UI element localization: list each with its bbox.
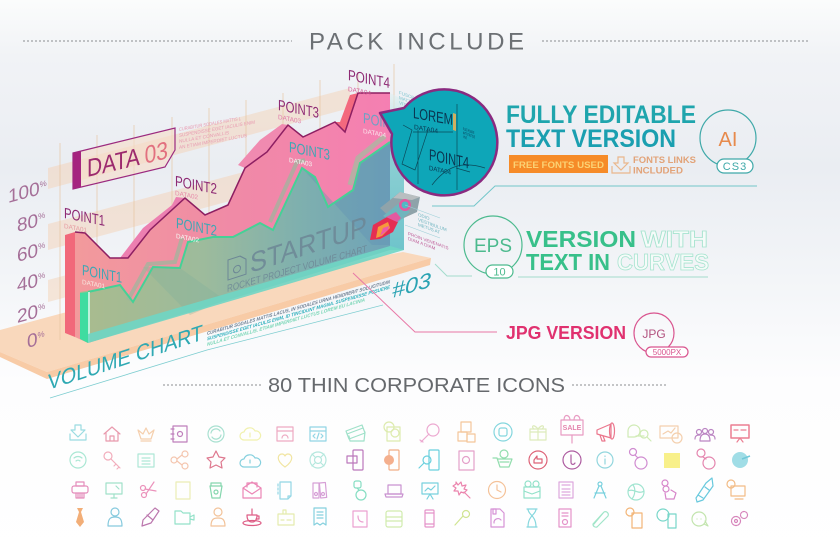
icon: chat gifts [697,449,715,469]
side notes by rocket: VITAE [399,100,412,110]
icon: paper clip [593,512,608,527]
side notes by rocket [399,90,448,256]
side notes by rocket: ODIO [418,212,429,221]
fonts links [633,155,696,176]
callout: fully editable: FULLY EDITABLE [506,101,696,129]
icon: presentation monitor [731,425,749,442]
icon: coins [384,422,400,441]
axis percentages [8,177,47,353]
badge: free fonts used: FREE FONTS USED [513,160,604,171]
fonts links: INCLUDED [633,166,683,176]
teal base band [88,246,404,343]
icon: note [278,482,291,499]
badge: JPG 5000PX [634,313,688,357]
icon: id card [138,454,154,467]
axis percentages: 20 [17,302,38,328]
icon: magnifier [420,424,439,442]
axis percentages: % [38,329,45,340]
pink series labels: DATA03 [278,114,301,126]
icon: cards [346,425,365,441]
data 03 tag [73,128,175,189]
chart number: #03 [392,268,431,303]
lorem sample: LOREM [413,105,453,129]
icon row 1 [70,415,749,443]
icon: monitor [106,483,122,498]
axis percentages: % [40,179,47,189]
tag description text: CURABITUR SODALES MATTIS L [179,116,241,133]
green area series [80,136,390,343]
side notes by rocket: MATTIS [399,95,415,106]
icon: presentation [422,483,438,499]
icon: search phone [419,450,439,470]
icon: cloud help [240,455,261,467]
icon: browser code [310,427,326,441]
icon: phone chat [626,508,642,528]
icon: cart [493,450,512,467]
axis percentages: % [38,241,45,251]
icon: envelope [243,482,261,498]
pink area series [65,93,390,343]
icon: phone orange [384,450,399,470]
icon: compass [594,482,606,498]
icon: chat magnifier [628,425,651,441]
icon: notebook [171,426,187,442]
icon row 2 [70,448,750,470]
icon: megaphone [597,423,614,441]
callout bubble: text zoom: FUSCE POSUERE [463,126,495,143]
badge: AI CS3: AI [719,129,737,151]
icon: coins hand [662,480,676,499]
icon: sale sign: SALE [563,425,582,432]
data 03 tag: DATA 03 [87,137,168,183]
icon: browser gauge [277,427,293,441]
teal series labels: DATA04 [363,128,386,140]
pink series labels: DATA01 [64,223,87,235]
icon: chart card [660,426,682,443]
teal series labels: POINT3 [289,139,330,164]
icon: document [314,508,326,525]
icon: lifebuoy [310,452,326,468]
icon: phone circle [563,451,581,469]
axis percentages: 0 [27,329,38,353]
icon: refresh [208,426,224,442]
peach level bands [48,88,350,302]
icon: printer [386,511,402,527]
teal series labels: DATA02 [176,233,199,245]
tag description text: SUSPENDISSE EGET IACULIS ENIM [179,120,255,139]
chart description text: SUSPENDISSE EGET IACULIS ENIM, ID TINCIDUNT MAGNA. SUSPENDISSE POSUERE [207,285,391,342]
teal series labels: POINT2 [176,215,217,240]
side notes by rocket: DIAM A DIAM [408,236,436,251]
pink series labels: DATA04 [348,86,371,98]
callout: text in curves: WITH [641,226,708,252]
icon: tie [76,508,84,527]
icon: phone card [347,450,363,470]
callout: text in curves: CURVES [617,249,709,275]
callout: text in curves [435,216,709,278]
icon: push pin [455,510,470,525]
icon: boxes [458,422,475,442]
icon: people [695,428,715,441]
badge: JPG 5000PX: JPG [642,327,666,341]
badge: EPS 10 [464,216,522,278]
side notes by rocket: FUSCE [399,90,414,100]
startup label: STARTUP [250,211,367,280]
tag description text: AN ETIAM IMPERDIET LUCTUS [179,133,247,151]
icon: download [612,157,630,173]
icon: heart [278,454,292,467]
icon: hourglass [527,509,537,527]
icon: pie chart [732,452,750,468]
icon: tablet [176,482,190,499]
heading: 80 thin corporate icons: 80 THIN CORPORATE ICONS [268,375,565,397]
badge: AI CS3 [700,110,756,173]
icon: cloud [240,428,261,440]
startup label [227,211,367,295]
teal series labels: POINT4 [363,110,404,135]
callout bubble: text zoom: DATA04 [414,124,438,135]
small notes: VITAE [463,134,467,140]
title: pack include: PACK INCLUDE [309,28,524,56]
icon: house [104,427,120,441]
badge: free fonts used [509,155,608,173]
icon: printer [72,482,88,498]
callout: jpg version [353,273,688,357]
icon: gift [530,426,546,440]
badge: JPG 5000PX: 5000PX [653,348,682,357]
point4 sample: POINT4 [429,146,469,172]
axis percentages: 40 [17,271,38,297]
chart description text: CURABITUR SODALES MATTIS LACUS, IN SODALES URNA HENDRERIT SOLLICITUDIN [207,279,390,337]
icon: circle box [494,423,512,441]
teal series labels: POINT1 [82,262,122,287]
pink series labels: POINT4 [348,67,390,92]
icon: star [207,451,225,468]
icon: burst magnifier [453,482,470,498]
icon: people link [630,448,647,469]
icon: globe chat [628,484,644,500]
callout: fully editable: TEXT VERSION [506,125,676,153]
axis percentages: % [38,271,45,281]
icon: document seal [559,509,571,527]
axis percentages: 80 [17,211,38,237]
pink series labels [64,67,390,235]
callout bubble: text zoom: MATTIS TRISTIQUE [463,130,475,139]
pink series labels: POINT1 [64,205,105,230]
icon: gears [732,512,748,526]
icon: sale sign [561,415,583,443]
icon: phone book [353,511,367,527]
icon: floppy document [228,254,246,280]
icon: rocket [370,192,420,240]
axis percentages: % [38,211,45,221]
pink series labels: DATA02 [175,190,198,202]
teal series labels [82,110,404,291]
callout bubble: text zoom [380,89,497,195]
axis percentages: 100 [8,179,40,208]
tag description text [179,114,255,151]
icon: binders [313,483,327,498]
isometric volume chart [0,64,431,398]
icon: info circle [597,452,613,468]
icon: wifi circle [70,452,86,468]
chart description text: NULLA ET CONVALLIS. ETIAM IMPERDIET LUCTUS LOREM EU LACINIA [207,297,365,348]
callout: text in curves: VERSION [526,226,636,252]
icon row 4 [76,508,748,528]
icon: like circle [529,451,547,469]
icon: document chart [491,509,504,527]
icon: key [104,452,120,469]
callout bubble: text zoom: DATA04 [429,165,451,177]
icon: share [171,451,188,469]
badge: EPS 10: 10 [493,266,506,278]
icon: pen [142,508,159,526]
side notes by rocket: PROIN VENENATIS [408,231,448,251]
teal side wall [390,93,404,250]
icon: calculator [559,482,573,498]
icon: woman [211,508,225,526]
icon row 3 [72,478,745,502]
volume chart caption: VOLUME CHART [48,320,203,395]
icon: rocket pen [696,478,713,502]
icon: folder video [175,511,194,524]
pink series labels: POINT3 [278,97,319,122]
icon: crown [138,428,154,441]
startup label: ROCKET PROJECT VOLUME CHART [227,244,367,295]
badge: EPS 10: EPS [474,236,512,257]
icon: scissors [140,482,156,498]
axis percentages: 60 [17,241,38,267]
callout: jpg version: JPG VERSION [506,323,626,343]
icon: id badge [278,510,294,525]
axis percentages: % [38,302,45,312]
side notes by rocket: METUS AT [418,222,440,235]
teal series labels: DATA03 [289,157,312,169]
volume chart caption [48,305,383,398]
icon: coffee cup [210,483,222,498]
icon: user [108,508,122,526]
side notes by rocket: VESTIBULUM [418,217,447,232]
icon: tablet [459,451,474,470]
icon: briefcase [524,481,540,498]
callout: text in curves: TEXT IN [526,249,610,275]
icon: molecule [354,481,366,500]
floor [0,252,431,379]
icon: smartphone [425,510,434,527]
pink series labels: POINT2 [175,173,217,198]
badge: AI CS3: CS3 [723,161,747,173]
fonts links: FONTS LINKS [633,155,696,166]
icon: sticky note [664,453,680,468]
tag description text: NULLA ET CONVALLIS [179,130,229,145]
vertical grid lines [60,64,394,340]
icon: chat bubble [692,512,708,526]
icon grid [70,415,750,528]
icon: download [70,425,86,440]
callout: fully editable [432,101,757,206]
icon: computer coins [727,480,745,499]
teal series labels: DATA01 [82,279,105,291]
icon: chat phone [657,509,676,528]
icon: laptop [385,485,403,497]
icon: coffee [243,509,261,526]
icon: clock [488,482,506,498]
